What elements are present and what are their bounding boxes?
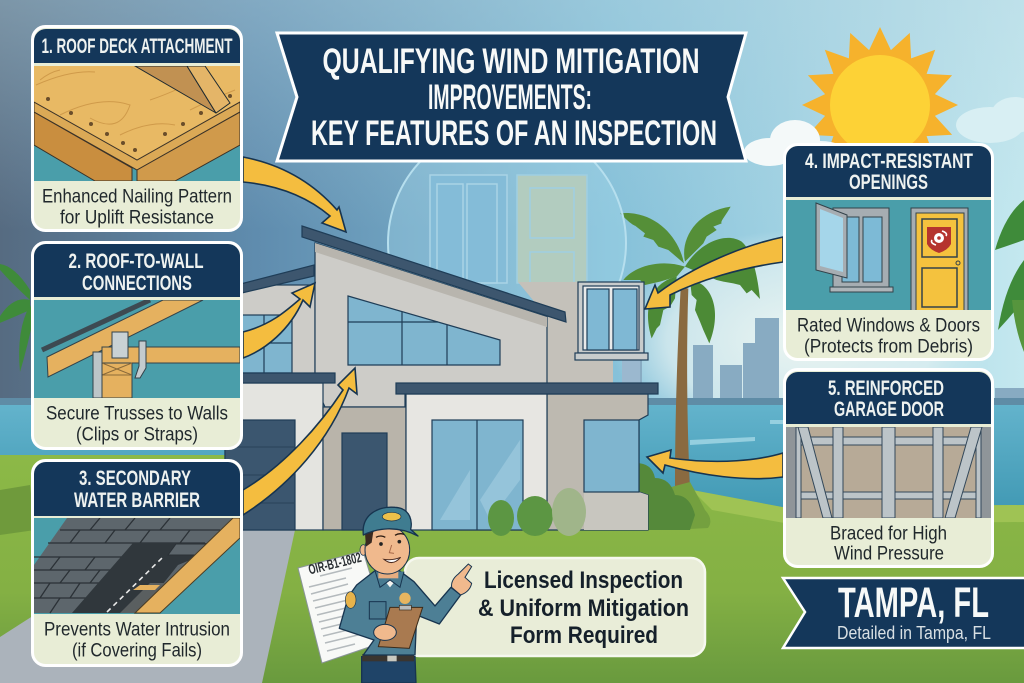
illustration: nailing pattern on roof deck xyxy=(34,66,240,181)
water xyxy=(0,405,1024,520)
caption xyxy=(44,620,230,662)
document: form OIR-B1-1802 xyxy=(298,549,390,663)
title: IMPROVEMENTS: xyxy=(428,78,592,117)
bushes xyxy=(488,488,586,536)
caption: Braced for High xyxy=(830,524,947,544)
heading xyxy=(34,462,240,516)
heading xyxy=(34,244,240,297)
heading xyxy=(786,372,991,424)
shirt xyxy=(339,571,461,655)
heading xyxy=(34,29,240,63)
house xyxy=(225,124,658,530)
arrow 5 xyxy=(647,450,783,479)
illustration: rated window and door xyxy=(786,200,991,318)
entry recess and door xyxy=(323,407,406,530)
heading: 5. REINFORCED xyxy=(828,377,944,400)
caption xyxy=(46,404,228,446)
panel: 3 secondary water barrier xyxy=(32,460,242,666)
pointing hand xyxy=(452,564,472,595)
window xyxy=(578,282,644,353)
document: form OIR-B1-1802: OIR-B1-1802 xyxy=(307,549,363,577)
main gable wall xyxy=(315,243,547,407)
title xyxy=(311,42,717,153)
arrow 2 xyxy=(243,283,315,358)
heading: 2. ROOF-TO-WALL xyxy=(68,250,204,273)
clipboard xyxy=(378,607,423,648)
driveway xyxy=(0,530,295,683)
title: KEY FEATURES OF AN INSPECTION xyxy=(311,114,717,153)
palm tree: centre xyxy=(620,207,760,488)
caption xyxy=(830,524,947,564)
location banner: Tampa, FL xyxy=(783,578,1024,648)
right block xyxy=(547,394,648,530)
illustration: truss clip and strap xyxy=(34,300,240,398)
neck and head xyxy=(378,563,398,578)
panel: 1 roof deck attachment xyxy=(32,26,242,230)
triangular window xyxy=(348,296,500,365)
heading: OPENINGS xyxy=(849,171,928,194)
callout: licensed inspection and form required xyxy=(405,558,705,656)
caption: Secure Trusses to Walls xyxy=(46,404,228,424)
left wing roof xyxy=(225,265,314,297)
callout: licensed inspection and form required: & Uniform Mitigation xyxy=(478,595,689,622)
caption xyxy=(797,316,980,358)
panel: 5 reinforced garage door xyxy=(784,370,992,566)
illustration: shingles and underlayment xyxy=(34,518,240,614)
heading: GARAGE DOOR xyxy=(834,398,944,421)
garage block xyxy=(225,383,323,530)
city skyline xyxy=(0,318,1024,405)
inspector character xyxy=(339,507,472,683)
callout: licensed inspection and form required: Form Required xyxy=(510,622,658,649)
illustration: garage door bracing xyxy=(786,427,991,518)
caption: for Uplift Resistance xyxy=(60,208,214,228)
bushes behind house xyxy=(636,463,710,530)
upper right block xyxy=(518,282,613,383)
caption: (Clips or Straps) xyxy=(76,424,198,446)
panel: 2 roof-to-wall connections xyxy=(32,242,242,448)
pants xyxy=(362,657,416,683)
background: sky xyxy=(0,0,1024,460)
caption: Prevents Water Intrusion xyxy=(44,620,230,640)
caption xyxy=(42,186,232,228)
left wing wall xyxy=(225,285,315,375)
heading xyxy=(786,146,991,197)
arrow 1 xyxy=(243,157,346,232)
callout: licensed inspection and form required: Licensed Inspection xyxy=(484,567,683,594)
arrow 4 xyxy=(645,237,783,309)
heading: WATER BARRIER xyxy=(74,489,200,512)
heading: 4. IMPACT-RESISTANT xyxy=(805,150,973,173)
caption: (Protects from Debris) xyxy=(804,336,973,358)
heading: CONNECTIONS xyxy=(82,272,192,295)
caption: Rated Windows & Doors xyxy=(797,316,980,336)
centre white block xyxy=(406,394,547,530)
main roof xyxy=(302,226,566,322)
title banner xyxy=(277,33,746,161)
heading: 1. ROOF DECK ATTACHMENT xyxy=(42,35,233,58)
panel: 4 impact-resistant openings xyxy=(784,144,992,360)
palm tree: right edge xyxy=(995,200,1024,352)
icon: sun xyxy=(802,27,958,183)
ghost dome with faint door and window xyxy=(388,124,626,362)
caption: Wind Pressure xyxy=(834,544,944,564)
cap xyxy=(363,507,418,536)
title: QUALIFYING WIND MITIGATION xyxy=(322,42,700,81)
heading: 3. SECONDARY xyxy=(79,467,191,490)
location banner: Tampa, FL: Detailed in Tampa, FL xyxy=(837,623,991,643)
caption: (if Covering Fails) xyxy=(72,640,202,662)
palm tree: left xyxy=(0,264,34,372)
ground: grass xyxy=(0,455,1024,683)
caption: Enhanced Nailing Pattern xyxy=(42,186,232,208)
clouds xyxy=(744,97,1024,169)
arrow 3 xyxy=(243,368,357,515)
